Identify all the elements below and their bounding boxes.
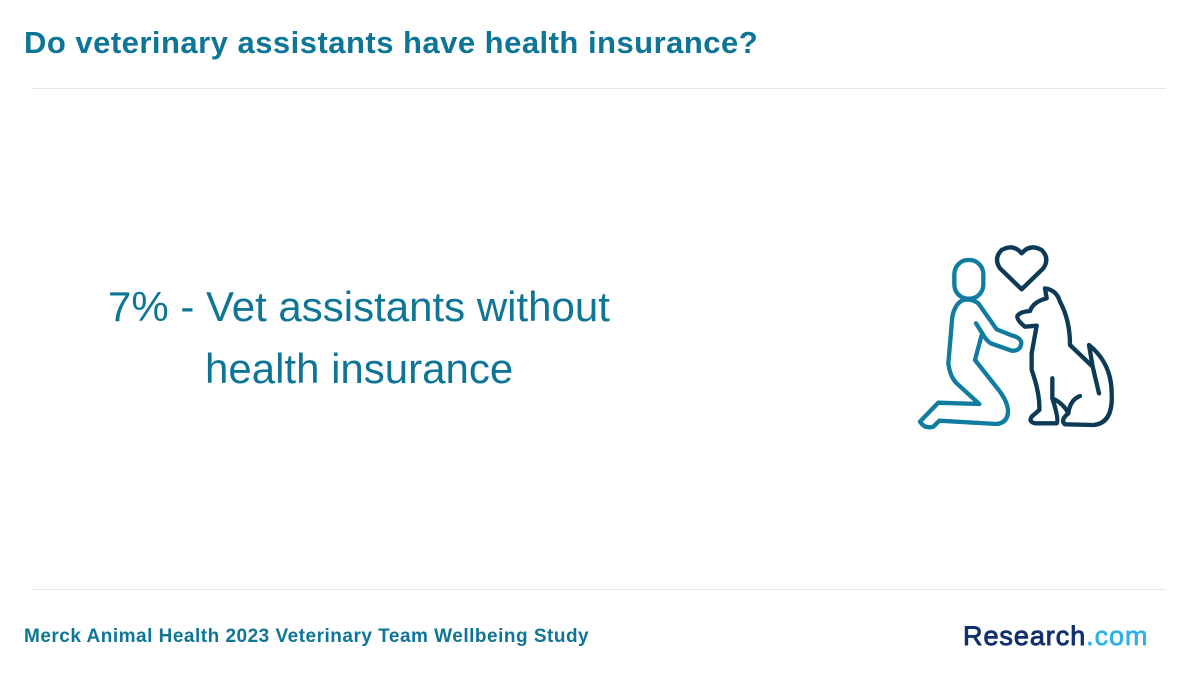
source text: Merck Animal Health 2023 Veterinary Team Wellbeing Study [24,626,589,647]
icon: person with dog and heart [918,245,1114,430]
person [920,260,1021,427]
main statistic text [108,283,610,392]
dog [1017,288,1112,425]
title: Do veterinary assistants have health insurance? [24,25,758,60]
logo: Research.com: Research.com [963,621,1148,651]
main statistic text: health insurance [205,345,513,392]
main statistic text: 7% - Vet assistants without [108,283,610,330]
heart [997,247,1046,289]
